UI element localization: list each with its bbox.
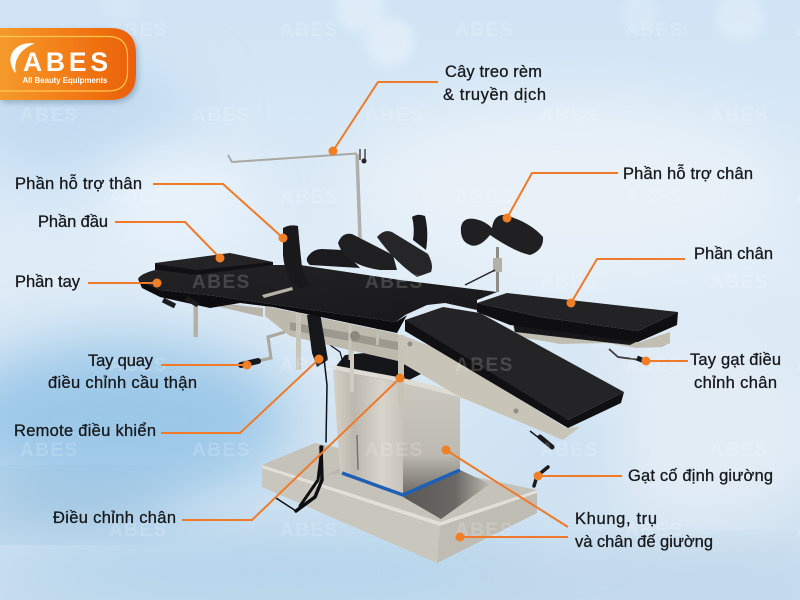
steel frame under right leg (513, 322, 670, 362)
right leg section (477, 293, 678, 342)
label: Khung, trụ và chân đế giường: và chân đế giường (575, 533, 713, 551)
watermarks: repeated ABES logo: ABES (455, 355, 514, 376)
lower left leg frame (398, 335, 580, 447)
remote control (307, 313, 328, 367)
arm and torso section (138, 265, 497, 333)
watermarks: repeated ABES logo: ABES (625, 20, 684, 41)
right leg rest (461, 215, 543, 292)
operating table illustration (138, 149, 678, 563)
watermarks: repeated ABES logo: ABES (280, 187, 339, 208)
logo: ABES badge: All Beauty Equipments (22, 76, 108, 85)
logo: ABES badge (0, 28, 136, 100)
watermarks: repeated ABES logo: ABES (455, 20, 514, 41)
watermarks: repeated ABES logo: ABES (109, 187, 168, 208)
watermarks: repeated ABES logo: ABES (192, 440, 251, 461)
watermarks: repeated ABES logo: ABES (540, 440, 599, 461)
label: Phần tay (15, 273, 162, 291)
label: Điều chỉnh chân (53, 374, 404, 527)
watermarks: repeated ABES logo: ABES (109, 20, 168, 41)
label: Phần đầu (38, 213, 224, 262)
watermarks: repeated ABES logo: ABES (710, 440, 769, 461)
crank handle (241, 332, 285, 365)
label: Phần hỗ trợ thân: Phần hỗ trợ thân (15, 174, 142, 193)
back pad and right body support (307, 215, 427, 268)
label: Tay gạt điều chỉnh chân (642, 351, 781, 392)
label: Cây treo rèm: Cây treo rèm (445, 63, 542, 81)
label: Phần hỗ trợ thân (15, 174, 288, 242)
label: Remote điều khiển (14, 354, 324, 440)
fixing lever icon (534, 467, 548, 486)
column (322, 342, 460, 495)
watermarks: repeated ABES logo: ABES (192, 105, 251, 126)
label: Tay quay điều chỉnh cầu thận: điều chỉnh cầu thận (48, 374, 197, 392)
head section (155, 253, 273, 276)
watermarks: repeated ABES logo: ABES (109, 355, 168, 376)
watermarks: repeated ABES logo: ABES (365, 105, 424, 126)
watermarks: repeated ABES logo: ABES (280, 520, 339, 541)
steel frame under torso (194, 282, 398, 370)
label: Phần chân (566, 245, 773, 308)
watermarks: repeated ABES logo: ABES (192, 272, 251, 293)
watermarks: repeated ABES logo: ABES (540, 105, 599, 126)
watermarks: repeated ABES logo: ABES (20, 440, 79, 461)
watermarks: repeated ABES logo: ABES (625, 187, 684, 208)
watermarks: repeated ABES logo: ABES (365, 440, 424, 461)
watermarks: repeated ABES logo: ABES (540, 272, 599, 293)
watermarks: repeated ABES logo: ABES (710, 105, 769, 126)
remote cable (276, 345, 344, 511)
watermarks: repeated ABES logo: ABES (710, 272, 769, 293)
label: Gạt cố định giường (534, 467, 773, 485)
label: Phần tay: Phần tay (15, 273, 81, 291)
label: Tay gạt điều chỉnh chân: Tay gạt điều (690, 351, 781, 369)
watermarks: repeated ABES logo: ABES (109, 520, 168, 541)
label: Cây treo rèm: & truyền dịch (443, 86, 546, 104)
label: Tay quay điều chỉnh cầu thận: Tay quay (88, 352, 154, 370)
watermarks: repeated ABES logo: ABES (455, 187, 514, 208)
left leg section (405, 307, 624, 428)
watermarks: repeated ABES logo: ABES (455, 520, 514, 541)
label: Gạt cố định giường: Gạt cố định giường (628, 467, 773, 485)
watermarks: repeated ABES logo: ABES (365, 272, 424, 293)
label: Phần chân: Phần chân (694, 245, 773, 263)
watermarks: repeated ABES logo: ABES (625, 520, 684, 541)
label: Phần đầu: Phần đầu (38, 213, 108, 231)
label: Điều chỉnh chân: Điều chỉnh chân (53, 509, 176, 527)
label: Khung, trụ và chân đế giường: Khung, trụ (575, 510, 657, 528)
watermarks: repeated ABES logo: ABES (280, 355, 339, 376)
watermarks: repeated ABES logo: ABES (625, 355, 684, 376)
drape pole (228, 149, 366, 238)
left body support (262, 225, 310, 298)
label: Tay gạt điều chỉnh chân: chỉnh chân (694, 374, 777, 392)
watermarks: repeated ABES logo: ABES (20, 272, 79, 293)
label: Phần hỗ trợ chân (502, 164, 753, 222)
label: Tay quay điều chỉnh cầu thận (48, 352, 252, 392)
center leg rests (338, 231, 432, 277)
watermarks: repeated ABES logo: ABES (20, 105, 79, 126)
label: Phần hỗ trợ chân: Phần hỗ trợ chân (623, 164, 753, 183)
label: Remote điều khiển: Remote điều khiển (14, 422, 156, 440)
logo: ABES badge: ABES (23, 47, 108, 77)
label: Khung, trụ và chân đế giường (442, 446, 713, 551)
watermarks: repeated ABES logo: ABES (280, 20, 339, 41)
label: Cây treo rèm (328, 63, 546, 156)
base plate (262, 443, 537, 563)
